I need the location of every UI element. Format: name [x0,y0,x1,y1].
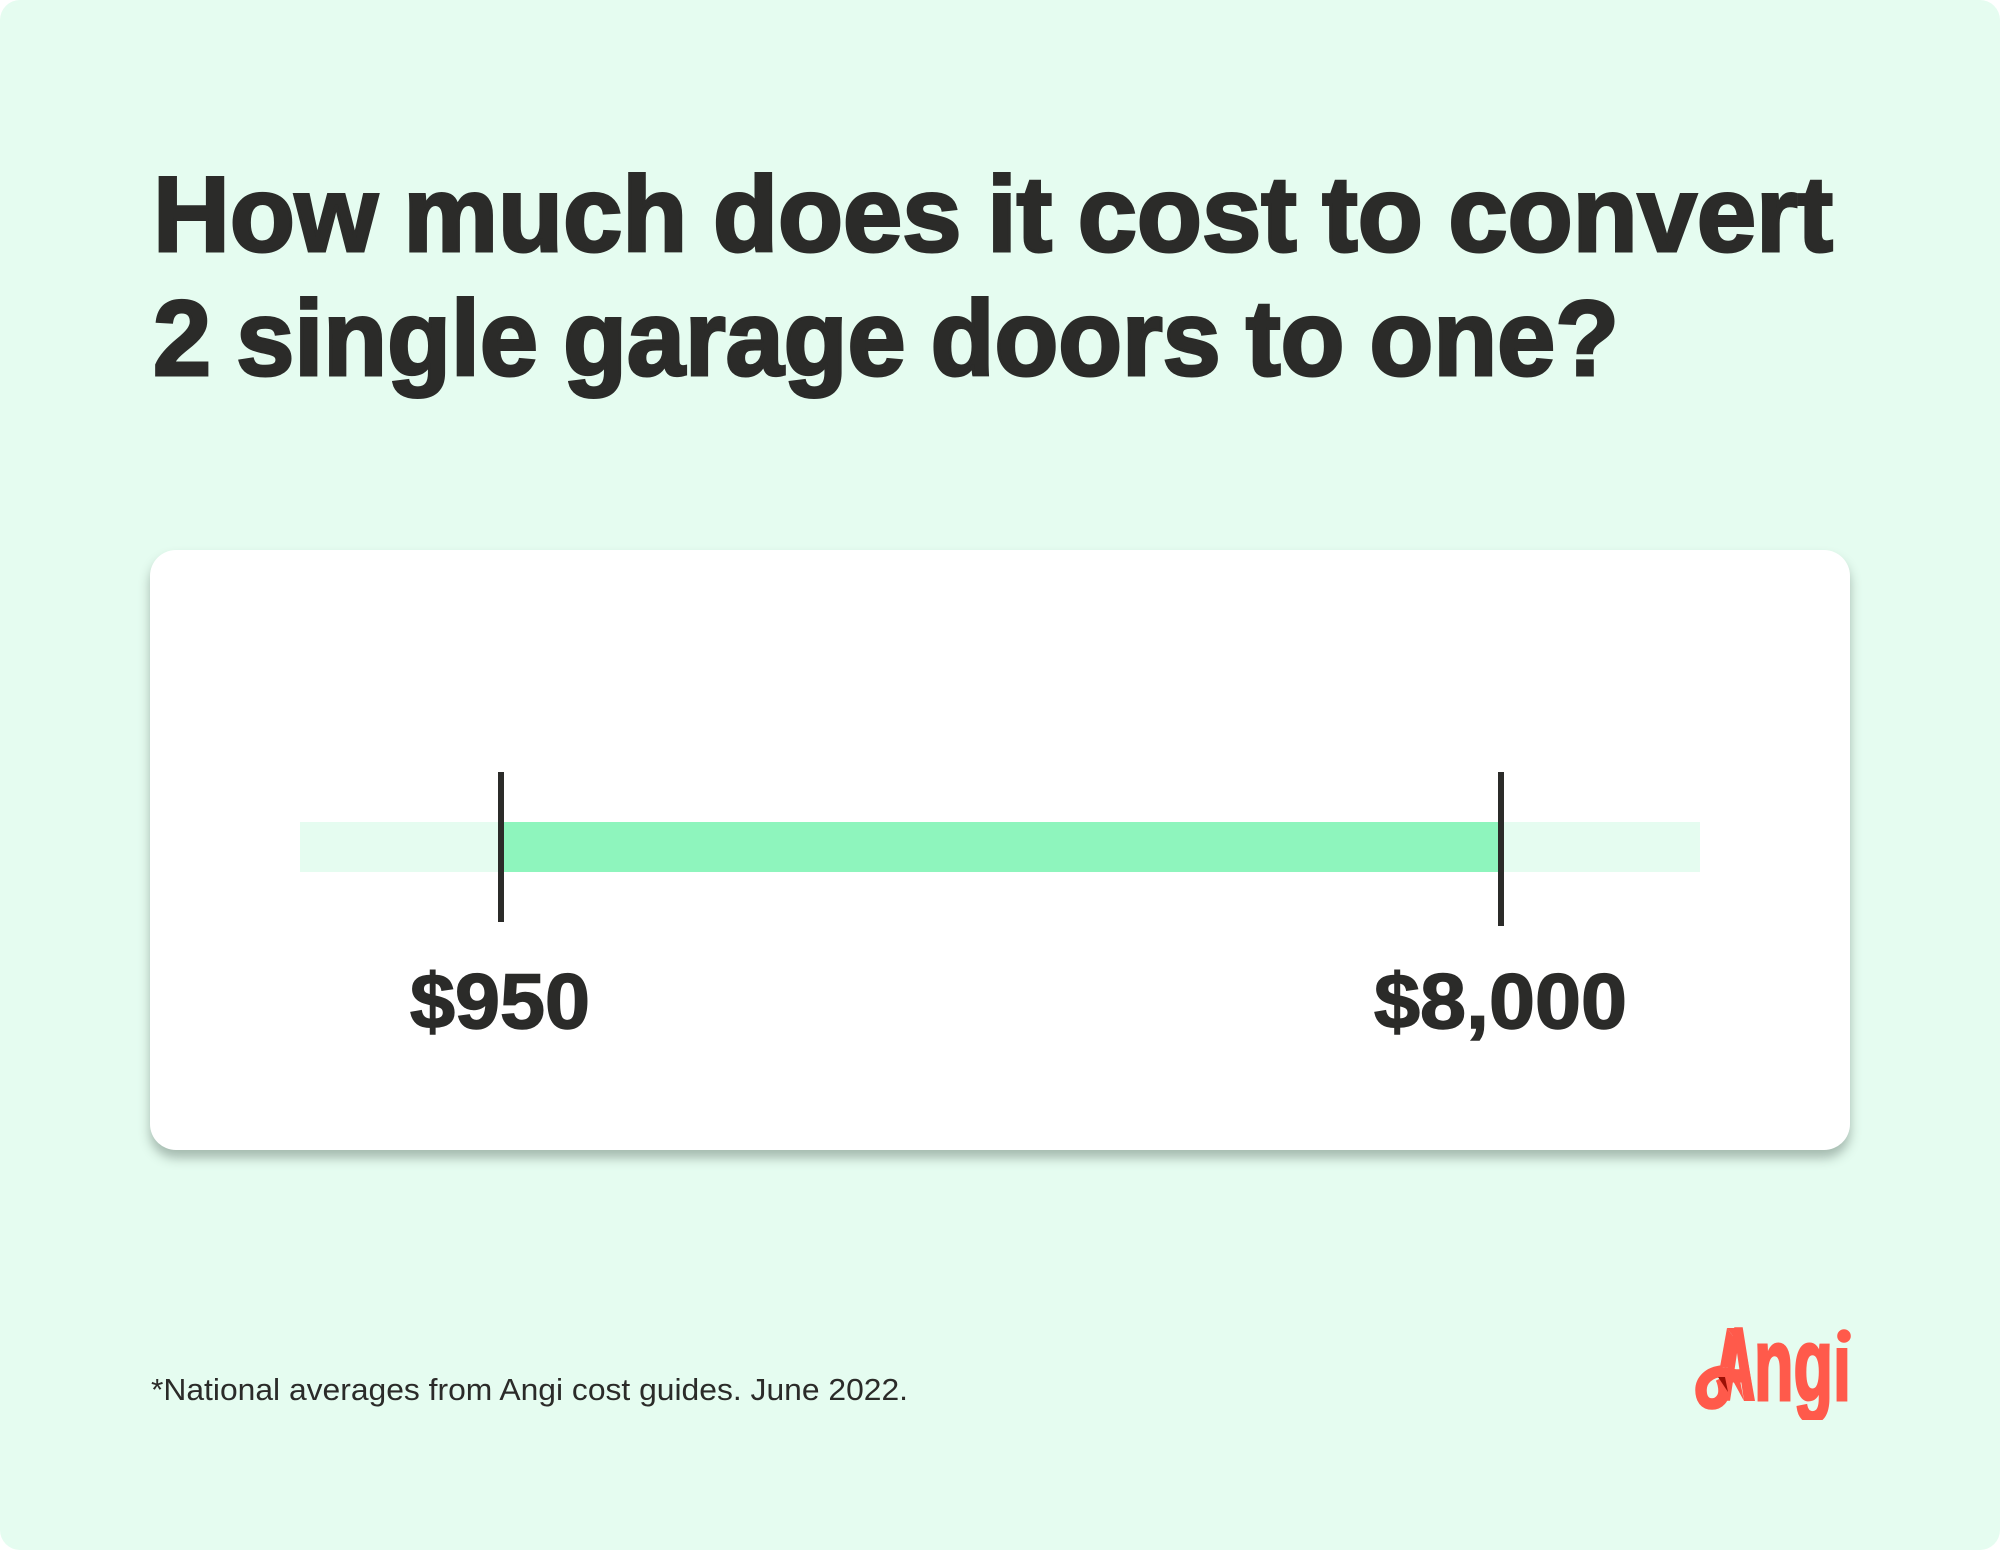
high value label: $8,000 [1374,957,1627,1045]
logo: Angi: A [1722,1307,1755,1423]
panel: white range card [150,550,1850,1150]
title [153,154,1833,398]
footnote: *National averages from Angi cost guides. June 2022. [151,1372,908,1407]
high marker tick [1498,772,1504,926]
range bar chart [300,772,1700,1045]
low value label: $950 [410,957,590,1045]
title: 2 single garage doors to one? [153,278,1619,398]
title: How much does it cost to convert [153,154,1833,274]
low marker tick [498,772,504,922]
full range track [300,822,1700,872]
logo: Angi: ngi [1754,1307,1851,1423]
highlighted cost range [500,822,1500,872]
logo: Angi [1701,1307,1855,1432]
